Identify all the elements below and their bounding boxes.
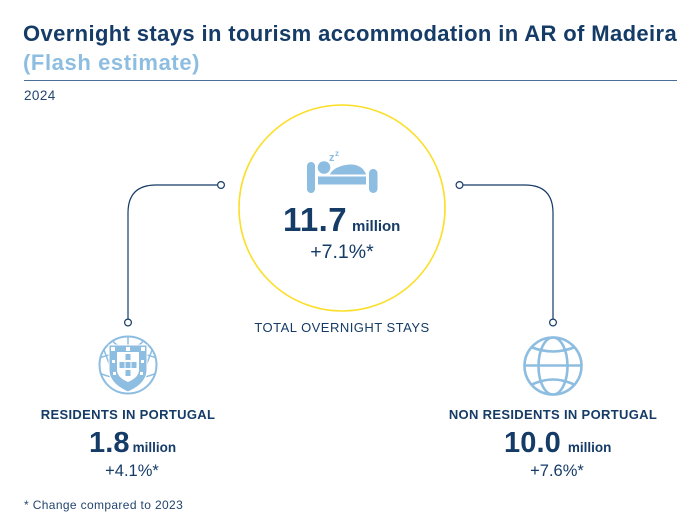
title <box>23 21 677 75</box>
total label: TOTAL OVERNIGHT STAYS <box>254 320 430 335</box>
residents label: RESIDENTS IN PORTUGAL <box>41 407 215 422</box>
residents value: 1.8million <box>89 427 176 459</box>
icon: portuguese coat of arms <box>100 336 156 394</box>
non residents value: 10.0 million <box>504 427 611 459</box>
total circle <box>239 105 445 311</box>
non residents change: +7.6%* <box>530 462 584 480</box>
residents change: +4.1%* <box>105 462 159 480</box>
connector right <box>456 182 556 326</box>
icon: bed: z <box>329 152 335 164</box>
title: (Flash estimate) <box>23 50 200 75</box>
icon: globe <box>524 338 582 394</box>
non residents label: NON RESIDENTS IN PORTUGAL <box>449 407 657 422</box>
header rule <box>24 80 677 82</box>
total change: +7.1%* <box>310 241 374 263</box>
title: Overnight stays in tourism accommodation in AR of Madeira <box>23 21 677 46</box>
total value: 11.7 million <box>283 201 400 238</box>
icon: bed <box>307 149 378 193</box>
icon: bed: z <box>335 149 339 158</box>
year label: 2024 <box>24 88 56 103</box>
footnote: * Change compared to 2023 <box>24 498 183 512</box>
connector left <box>125 182 224 326</box>
